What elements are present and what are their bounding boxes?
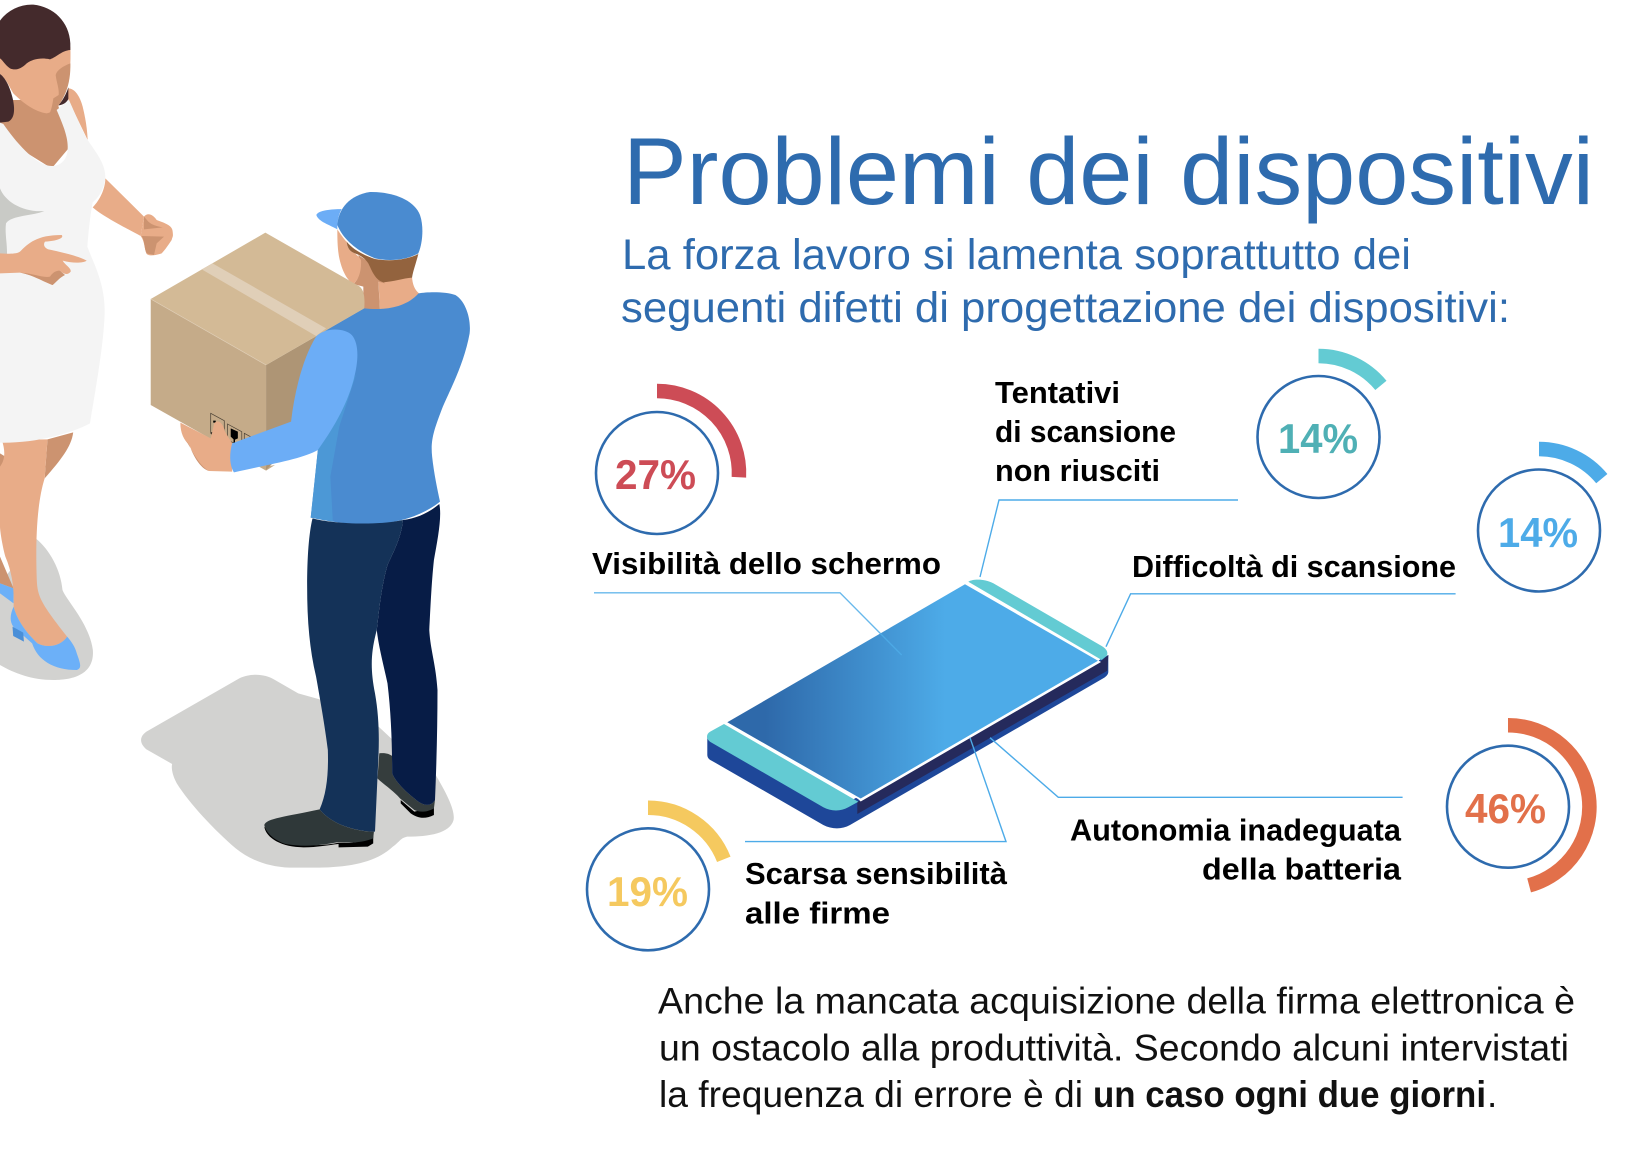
label: scanning difficulty: Difficoltà di scansione bbox=[1132, 549, 1456, 584]
stat: 27% screen visibility bbox=[596, 391, 739, 534]
subtitle: seguenti difetti di progettazione dei dispositivi: bbox=[621, 284, 1510, 332]
stat: 46% battery bbox=[1447, 725, 1589, 885]
leader lines bbox=[594, 500, 1456, 842]
label: signature sensitivity: Scarsa sensibilità bbox=[745, 856, 1008, 891]
stat: 19% signature: 19% bbox=[607, 868, 688, 915]
body text: Anche la mancata acquisizione della firma elettronica è bbox=[658, 981, 1575, 1022]
label: signature sensitivity bbox=[745, 856, 1008, 931]
label: failed scans: di scansione bbox=[995, 414, 1176, 449]
body text bbox=[658, 981, 1575, 1115]
illustration: woman receiving parcel bbox=[0, 5, 173, 680]
label: signature sensitivity: alle firme bbox=[745, 896, 890, 931]
stat: 14% failed scans: 14% bbox=[1278, 415, 1358, 462]
label: battery: della batteria bbox=[1202, 851, 1402, 886]
body text: un ostacolo alla produttività. Secondo alcuni intervistati bbox=[659, 1028, 1569, 1068]
body text: . bbox=[1487, 1074, 1497, 1115]
stat: 27% screen visibility: 27% bbox=[615, 451, 696, 498]
label: failed scans: non riusciti bbox=[995, 453, 1160, 488]
label: battery: Autonomia inadeguata bbox=[1070, 813, 1402, 848]
stat: 19% signature bbox=[587, 808, 724, 950]
phone illustration bbox=[707, 580, 1108, 828]
title: Problemi dei dispositivi bbox=[623, 119, 1594, 225]
body text: un caso ogni due giorni bbox=[1093, 1074, 1486, 1115]
stat: 14% scanning difficulty bbox=[1478, 449, 1602, 592]
label: screen visibility: Visibilità dello schermo bbox=[592, 546, 941, 581]
stat: 46% battery: 46% bbox=[1465, 785, 1546, 832]
stat: 14% failed scans bbox=[1258, 356, 1381, 498]
label: failed scans: Tentativi bbox=[995, 375, 1120, 410]
stat: 14% scanning difficulty: 14% bbox=[1498, 509, 1578, 556]
label: failed scans bbox=[995, 375, 1176, 488]
label: battery bbox=[1070, 813, 1402, 886]
body text: la frequenza di errore è di bbox=[659, 1074, 1083, 1115]
subtitle: La forza lavoro si lamenta soprattutto dei bbox=[622, 231, 1411, 279]
illustration: delivery man holding parcel bbox=[141, 192, 470, 868]
subtitle bbox=[621, 231, 1510, 332]
